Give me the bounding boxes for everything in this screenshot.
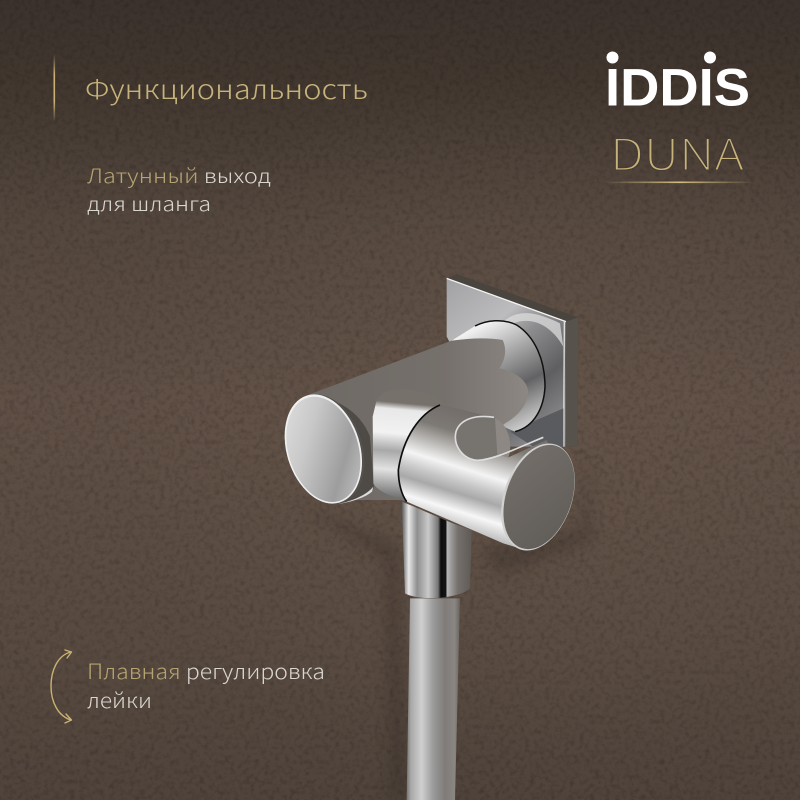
hose connector and hose bbox=[402, 502, 472, 800]
chrome knuckle: left segment bbox=[373, 389, 447, 502]
gray main body bbox=[308, 338, 528, 500]
feature text line two: лейки bbox=[87, 685, 152, 715]
soft shadow on wall bbox=[300, 450, 592, 800]
wall plate bbox=[308, 274, 578, 500]
feature text line two: для шланга bbox=[87, 188, 211, 217]
feature text: brass outlet: Латунный выход bbox=[87, 160, 271, 189]
gold underline bbox=[603, 182, 755, 183]
feature text: smooth adjustment: Плавная регулировка bbox=[87, 656, 325, 686]
lower plate detail bbox=[510, 408, 563, 447]
holder ring bbox=[452, 321, 545, 432]
product: chrome shower hose outlet bbox=[272, 274, 592, 800]
series name: duna: DUNA bbox=[610, 121, 744, 183]
joint line bbox=[398, 405, 440, 502]
heading with accent line: Функциональность bbox=[85, 68, 368, 107]
icon: curved double arrow bbox=[51, 650, 72, 723]
logo: iddis: IDDIS bbox=[605, 58, 750, 118]
chrome knuckle: right segment bbox=[398, 405, 557, 551]
right brushed cap bbox=[488, 434, 588, 560]
plate highlight bbox=[503, 313, 563, 347]
finger notch bbox=[455, 417, 500, 460]
left chrome cap bbox=[272, 385, 377, 513]
